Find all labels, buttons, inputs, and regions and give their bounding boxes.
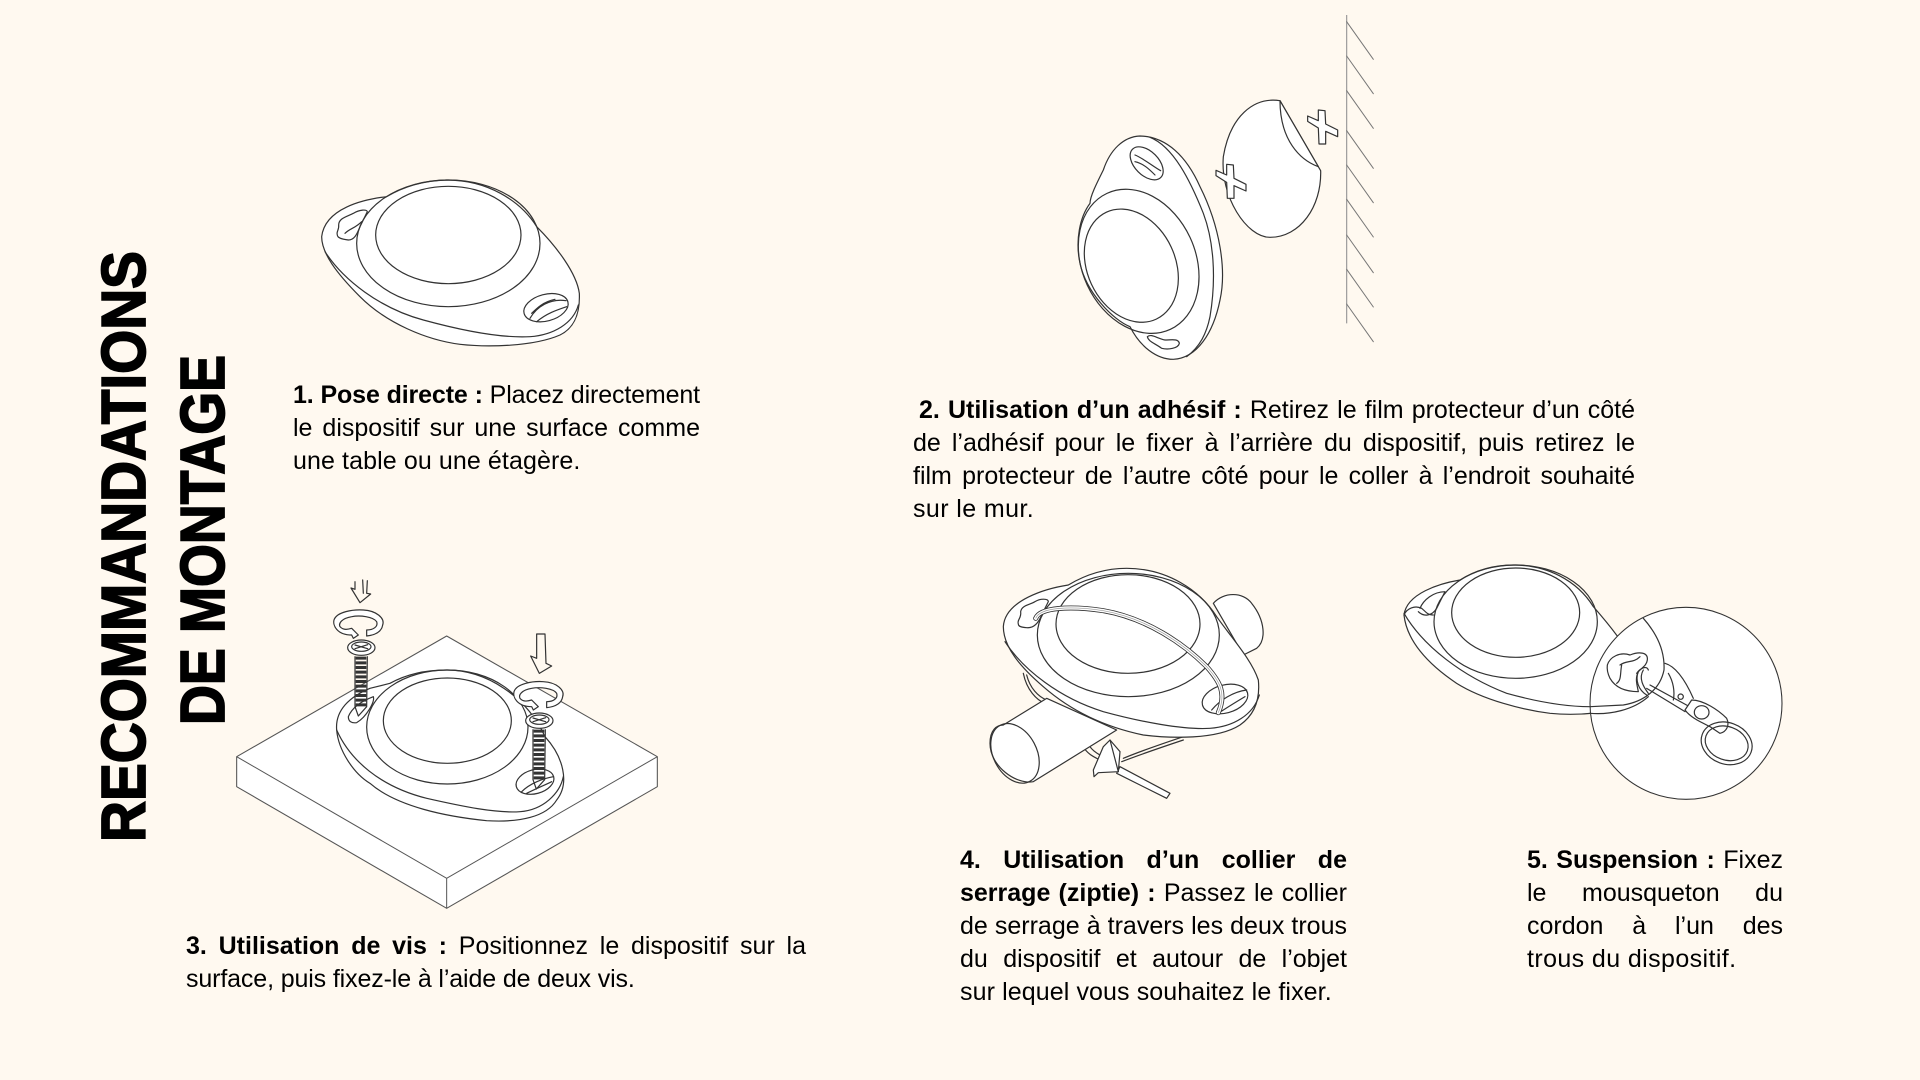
- text: suspension: cordon à l’un des: [1527, 912, 1783, 940]
- text: suspension: [1527, 846, 1783, 973]
- text: adhesif: 2. Utilisation d’un adhésif : Retirez le film protecteur d’un côté: [919, 396, 1635, 424]
- arrow right: [531, 634, 552, 673]
- text: vis: surface, puis fixez-le à l’aide de deux vis.: [186, 965, 635, 993]
- text: suspension: le mousqueton du: [1527, 879, 1783, 907]
- illustration: vis: [237, 580, 657, 908]
- detail magnifier: [1590, 607, 1782, 799]
- screw right: [526, 713, 553, 789]
- text: vis: [186, 932, 806, 993]
- illustration: adhesif: [1056, 15, 1373, 359]
- text: adhesif: [913, 396, 1635, 523]
- text: suspension: trous du dispositif.: [1527, 945, 1736, 973]
- title: RECOMMANDATIONS: [90, 251, 159, 842]
- text: suspension: 5. Suspension : Fixez: [1527, 846, 1783, 874]
- arrow left: [351, 580, 371, 603]
- text: pose directe: le dispositif sur une surface comme: [293, 414, 700, 442]
- illustration: pose directe: [322, 180, 579, 346]
- title: [90, 251, 238, 842]
- text: vis: 3. Utilisation de vis : Positionnez le dispositif sur la: [186, 932, 806, 960]
- title: DE MONTAGE: [169, 355, 238, 725]
- text: adhesif: sur le mur.: [913, 495, 1034, 523]
- text: collier de serrage: sur lequel vous souhaitez le fixer.: [960, 978, 1332, 1006]
- text: adhesif: film protecteur de l’autre côté pour le coller à l’endroit souhaité: [913, 462, 1635, 490]
- text: collier de serrage: de serrage à travers les deux trous: [960, 912, 1347, 940]
- illustration: collier de serrage: [981, 568, 1263, 798]
- text: pose directe: 1. Pose directe : Placez directement: [293, 381, 700, 409]
- text: collier de serrage: du dispositif et autour de l’objet: [960, 945, 1347, 973]
- text: pose directe: [293, 381, 700, 475]
- washer right: [514, 682, 563, 710]
- text: collier de serrage: serrage (ziptie) : Passez le collier: [960, 879, 1347, 907]
- illustration: suspension: [1404, 565, 1782, 799]
- device: [337, 670, 564, 821]
- support plate: [237, 636, 657, 908]
- washer left: [334, 610, 383, 638]
- text: collier de serrage: 4. Utilisation d’un collier de: [960, 846, 1347, 874]
- text: collier de serrage: [960, 846, 1347, 1006]
- text: adhesif: de l’adhésif pour le fixer à l’arrière du dispositif, puis retirez le: [913, 429, 1635, 457]
- text: pose directe: une table ou une étagère.: [293, 447, 580, 475]
- screw left: [348, 640, 375, 716]
